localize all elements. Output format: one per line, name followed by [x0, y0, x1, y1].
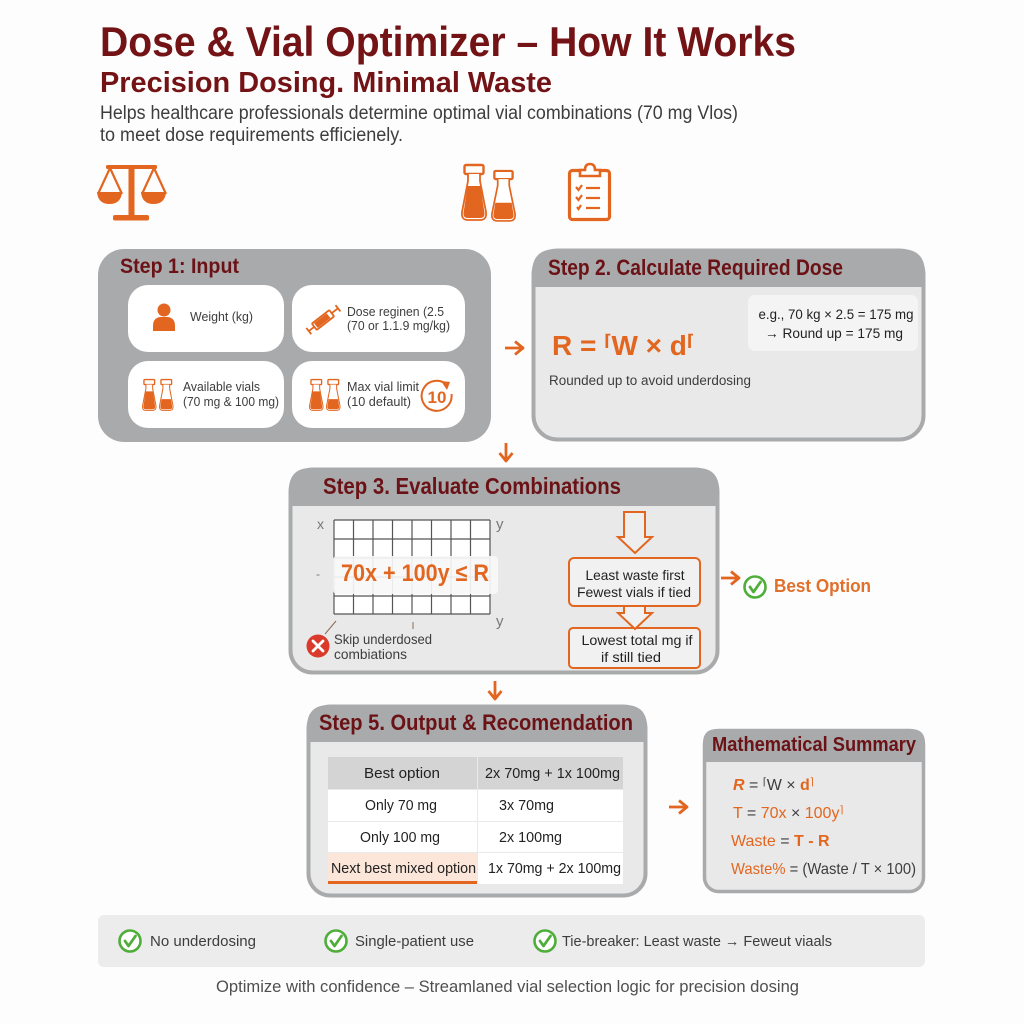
formula lines: d — [800, 777, 810, 794]
card: weight — [128, 285, 284, 352]
max vial label: Max vial limit — [347, 379, 419, 394]
card: max vial limit — [292, 361, 465, 428]
box: least waste — [569, 558, 700, 606]
arrow: to best option — [721, 572, 739, 584]
table: options: 3x 70mg — [499, 798, 554, 814]
box: least waste: Fewest vials if tied — [577, 584, 691, 600]
icon: two vials — [462, 165, 515, 221]
formula: constraint — [333, 556, 498, 594]
formula: required dose: R = — [552, 330, 596, 361]
heading: step 2: Step 2. Calculate Required Dose — [548, 255, 843, 280]
box: lowest total: if still tied — [601, 649, 661, 665]
description text — [100, 103, 738, 146]
table: options: 2x 100mg — [499, 830, 562, 846]
dose label: (70 or 1.1.9 mg/kg) — [347, 318, 450, 333]
formula lines: ⌉ — [839, 805, 843, 816]
max vial label: (10 default) — [347, 394, 411, 409]
formula lines: R = — [733, 777, 758, 794]
panel: step 2 calculate — [532, 249, 925, 440]
note: rounding: Rounded up to avoid underdosing — [549, 373, 751, 388]
icon: balance scale — [97, 165, 166, 220]
tagline: Optimize with confidence – Streamlaned vial selection logic for precision dosing — [216, 977, 799, 996]
arrow: step 1 to step 2 — [505, 342, 523, 354]
hollow arrow: down to tie-break — [618, 512, 652, 553]
table: options: Only 100 mg — [360, 830, 440, 846]
table: options: 1x 70mg + 2x 100mg — [488, 861, 621, 877]
formula: required dose: ⌈ — [687, 333, 694, 350]
grid of combinations: x — [317, 516, 324, 532]
heading: summary: Mathematical Summary — [712, 734, 917, 756]
formula lines: ⌈ — [763, 777, 767, 788]
check: tie breaker: Tie-breaker: Least waste → Feweut viaals — [562, 933, 832, 950]
formula lines — [731, 777, 916, 878]
icon: clipboard checklist — [570, 164, 610, 220]
table: options: 2x 70mg + 1x 100mg — [485, 766, 620, 782]
max vial label — [347, 379, 419, 409]
arrow: to summary — [669, 800, 687, 814]
subtitle: Precision Dosing. Minimal Waste — [100, 67, 552, 99]
dose label: Dose reginen (2.5 — [347, 304, 444, 319]
heading: step 1: Step 1: Input — [120, 255, 239, 278]
description text: to meet dose requirements efficienely. — [100, 125, 403, 146]
check: single patient — [326, 930, 474, 952]
panel: step 1 input — [98, 249, 491, 442]
available vials label — [183, 379, 279, 409]
icon: ten circular arrow — [422, 381, 452, 411]
icon: best option check — [744, 576, 766, 598]
icon: ten circular arrow: 10 — [428, 388, 446, 407]
weight label: Weight (kg) — [190, 309, 253, 324]
card: available vials — [128, 361, 284, 428]
heading: step 5: Step 5. Output & Recomendation — [319, 710, 633, 735]
icon: syringe — [306, 305, 340, 334]
grid of combinations: - — [316, 567, 320, 581]
grid of combinations: y — [496, 516, 504, 533]
table: options: Next best mixed option — [331, 861, 476, 877]
panel: step 3 evaluate — [289, 468, 719, 672]
label: best option: Best Option — [774, 576, 871, 596]
box: lowest total — [569, 628, 700, 668]
formula lines: T = 70x × 100y — [733, 805, 839, 822]
available vials label: (70 mg & 100 mg) — [183, 394, 279, 409]
note: skip underdosed: combiations — [334, 647, 407, 662]
hollow arrow: between boxes — [618, 606, 652, 629]
box: least waste: Least waste first — [586, 567, 685, 583]
callout: example: → Round up = 175 mg — [765, 325, 903, 341]
formula: constraint: 70x + 100y ≤ R — [341, 560, 489, 587]
description text: Helps healthcare professionals determine optimal vial combinations (70 mg Vlos) — [100, 103, 738, 124]
check: no underdosing — [120, 930, 256, 952]
formula lines: Waste = T - R — [731, 833, 830, 850]
note: skip underdosed: Skip underdosed — [334, 632, 432, 647]
table: options: Only 70 mg — [365, 798, 437, 814]
title: Dose & Vial Optimizer – How It Works — [100, 18, 796, 65]
dose label — [347, 304, 450, 333]
pointer arrows — [325, 621, 413, 634]
note: skip underdosed — [334, 632, 432, 662]
check: no underdosing: No underdosing — [150, 933, 256, 950]
card: dose regimen — [292, 285, 465, 352]
heading: step 3: Step 3. Evaluate Combinations — [323, 473, 621, 499]
icon: red cross — [306, 634, 330, 658]
check: single patient: Single-patient use — [355, 933, 474, 950]
grid of combinations — [316, 516, 504, 630]
formula lines: ⌉ — [810, 777, 814, 788]
arrow: step 2 to step 3 — [500, 443, 512, 461]
table: options: Best option — [364, 766, 440, 782]
formula: required dose: ⌈ — [604, 333, 611, 350]
available vials label: Available vials — [183, 379, 260, 394]
icon: small vials — [142, 380, 173, 410]
formula: required dose: W × d — [611, 330, 687, 361]
callout: example — [748, 295, 918, 351]
box: lowest total: Lowest total mg if — [582, 632, 693, 648]
arrow: step 3 to step 5 — [488, 681, 502, 699]
panel: step 5 output — [307, 705, 647, 896]
icon: person — [153, 304, 175, 331]
grid of combinations: y — [496, 613, 504, 630]
panel: mathematical summary — [703, 729, 925, 892]
table: options — [328, 757, 623, 884]
formula lines: Waste% = (Waste / T × 100) — [731, 861, 916, 878]
panel: footer checks — [98, 915, 925, 967]
icon: small vials — [309, 380, 340, 410]
callout: example: e.g., 70 kg × 2.5 = 175 mg — [758, 306, 914, 322]
formula lines: W × — [767, 777, 800, 794]
